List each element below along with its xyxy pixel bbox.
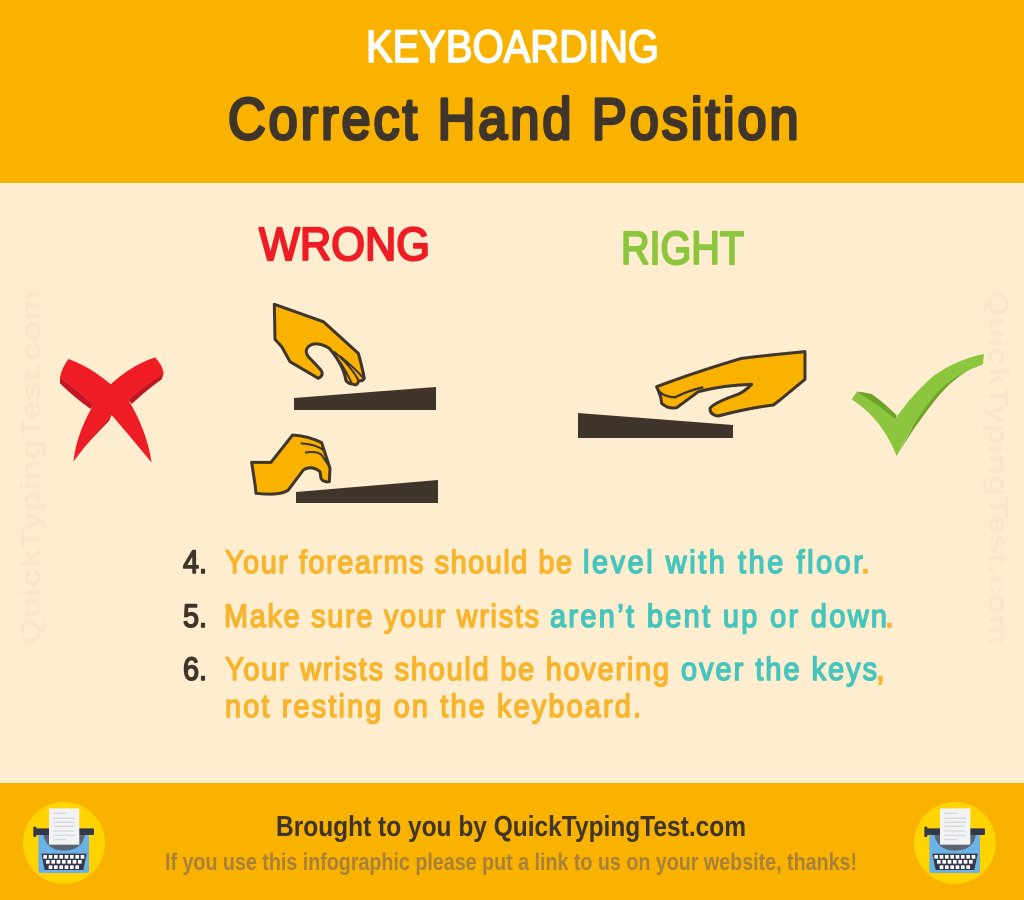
item 4: Your forearms should be: [225, 545, 572, 580]
item 5: 5.: [183, 598, 207, 634]
item 5: .: [885, 598, 894, 634]
footer credit: Brought to you by QuickTypingTest.com: [276, 811, 746, 843]
label: RIGHT: RIGHT: [621, 222, 744, 274]
title: KEYBOARDING: KEYBOARDING: [366, 21, 659, 72]
item 5: Make sure your wrists: [224, 599, 539, 634]
item 6: over the keys: [681, 652, 877, 687]
item 6: Your wrists should be hovering: [225, 652, 669, 687]
hand: wrong, wrist bent up: [252, 435, 330, 494]
keyboard wedge: top wrong: [294, 387, 436, 410]
footer note: If you use this infographic please put a link to us on your website, thanks!: [165, 849, 857, 876]
heading: Correct Hand Position: Correct Hand Position: [228, 86, 799, 152]
hand: right, level wrist: [657, 352, 805, 416]
item 4: .: [861, 544, 870, 580]
item 4: [183, 544, 870, 580]
item 6: [183, 651, 885, 724]
label: WRONG: WRONG: [259, 218, 430, 270]
item 4: level with the floor: [583, 545, 863, 580]
footer band: [0, 783, 1024, 900]
instructions list: [183, 544, 894, 724]
icon: typewriter left: [23, 802, 105, 884]
item 4: 4.: [183, 544, 207, 580]
icon: typewriter right: [914, 802, 996, 884]
hand: wrong, wrist bent down: [274, 304, 364, 385]
keyboard wedge: right: [578, 413, 733, 438]
watermark left: QuickTypingTest.com: [15, 290, 46, 645]
icon: green check: [852, 354, 985, 456]
item 6: 6.: [183, 651, 207, 687]
item 5: aren’t bent up or down: [550, 599, 887, 634]
watermark right: QuickTypingTest.com: [983, 290, 1014, 645]
keyboard wedge: bottom wrong: [296, 480, 438, 503]
item 6: ,: [876, 651, 885, 687]
item 5: [183, 598, 894, 634]
item 6: not resting on the keyboard.: [225, 689, 641, 724]
header band: [0, 0, 1024, 183]
icon: red cross: [60, 357, 164, 463]
